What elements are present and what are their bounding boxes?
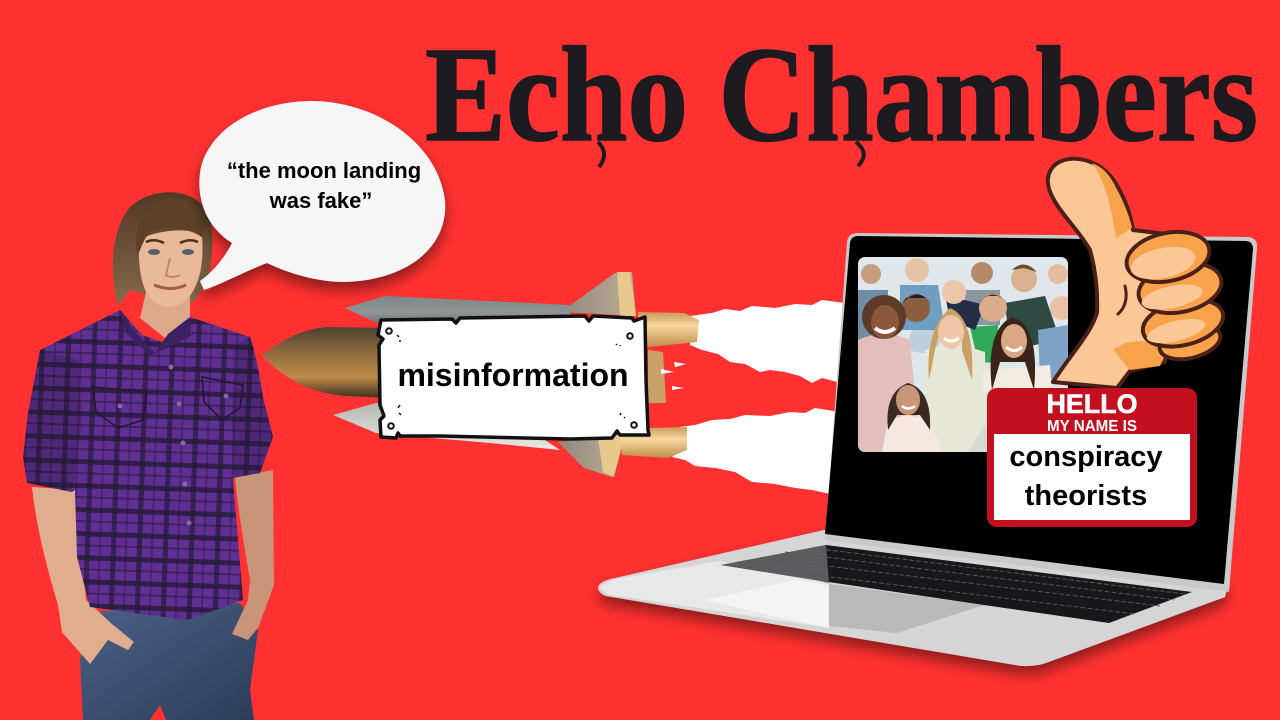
misinformation sign: misinformation <box>397 357 629 393</box>
eyes, nose and mouth <box>146 240 198 288</box>
name tag: conspiracy <box>1009 441 1163 473</box>
thumbs up <box>1048 159 1228 388</box>
lower wing <box>558 434 626 477</box>
speech bubble: “the moon landing <box>227 158 421 183</box>
pockets and buttons <box>93 364 243 526</box>
shirt <box>23 310 273 620</box>
right arm <box>232 470 274 640</box>
middle finger <box>1134 256 1226 320</box>
base <box>598 530 1229 666</box>
person <box>23 192 274 720</box>
speech bubble <box>199 101 445 290</box>
hand and thumb <box>1048 159 1175 388</box>
bodies <box>858 285 1068 452</box>
engine nozzles <box>638 312 699 347</box>
hair back <box>113 192 213 306</box>
upper booster <box>345 296 570 330</box>
name tag: HELLO <box>1046 389 1138 419</box>
keyboard reflection <box>721 545 829 583</box>
small flames <box>661 362 686 390</box>
little finger <box>1156 319 1224 365</box>
left arm <box>32 487 134 664</box>
finger crease <box>1118 286 1126 314</box>
neck <box>140 292 190 338</box>
collar <box>120 310 191 355</box>
exhaust trails <box>672 300 845 496</box>
laptop <box>598 233 1257 666</box>
trackpad reflection <box>829 584 984 633</box>
upper wing <box>561 272 636 316</box>
sleeve shading <box>23 337 273 492</box>
jeans <box>80 603 258 720</box>
name tag: theorists <box>1025 480 1147 512</box>
speech bubble: was fake” <box>269 188 372 213</box>
group photo <box>858 257 1074 452</box>
index finger <box>1122 225 1214 289</box>
rocket <box>262 272 699 477</box>
keyboard rows <box>740 548 1185 614</box>
back row faces <box>861 258 1074 322</box>
thumb shading <box>1092 163 1132 238</box>
misinformation sign <box>378 316 649 439</box>
front row faces <box>862 295 1035 430</box>
name tag <box>987 388 1197 527</box>
fringe <box>136 198 204 256</box>
name tag: MY NAME IS <box>1047 418 1137 435</box>
trackpad <box>704 580 829 628</box>
screen <box>825 236 1253 584</box>
lid <box>825 233 1257 592</box>
face <box>139 230 202 307</box>
lower booster <box>333 403 560 450</box>
palm shading <box>1113 341 1166 370</box>
keyboard <box>721 545 1192 623</box>
ring finger <box>1138 292 1228 354</box>
main tank <box>262 327 390 398</box>
left palm rest highlight <box>600 561 829 628</box>
